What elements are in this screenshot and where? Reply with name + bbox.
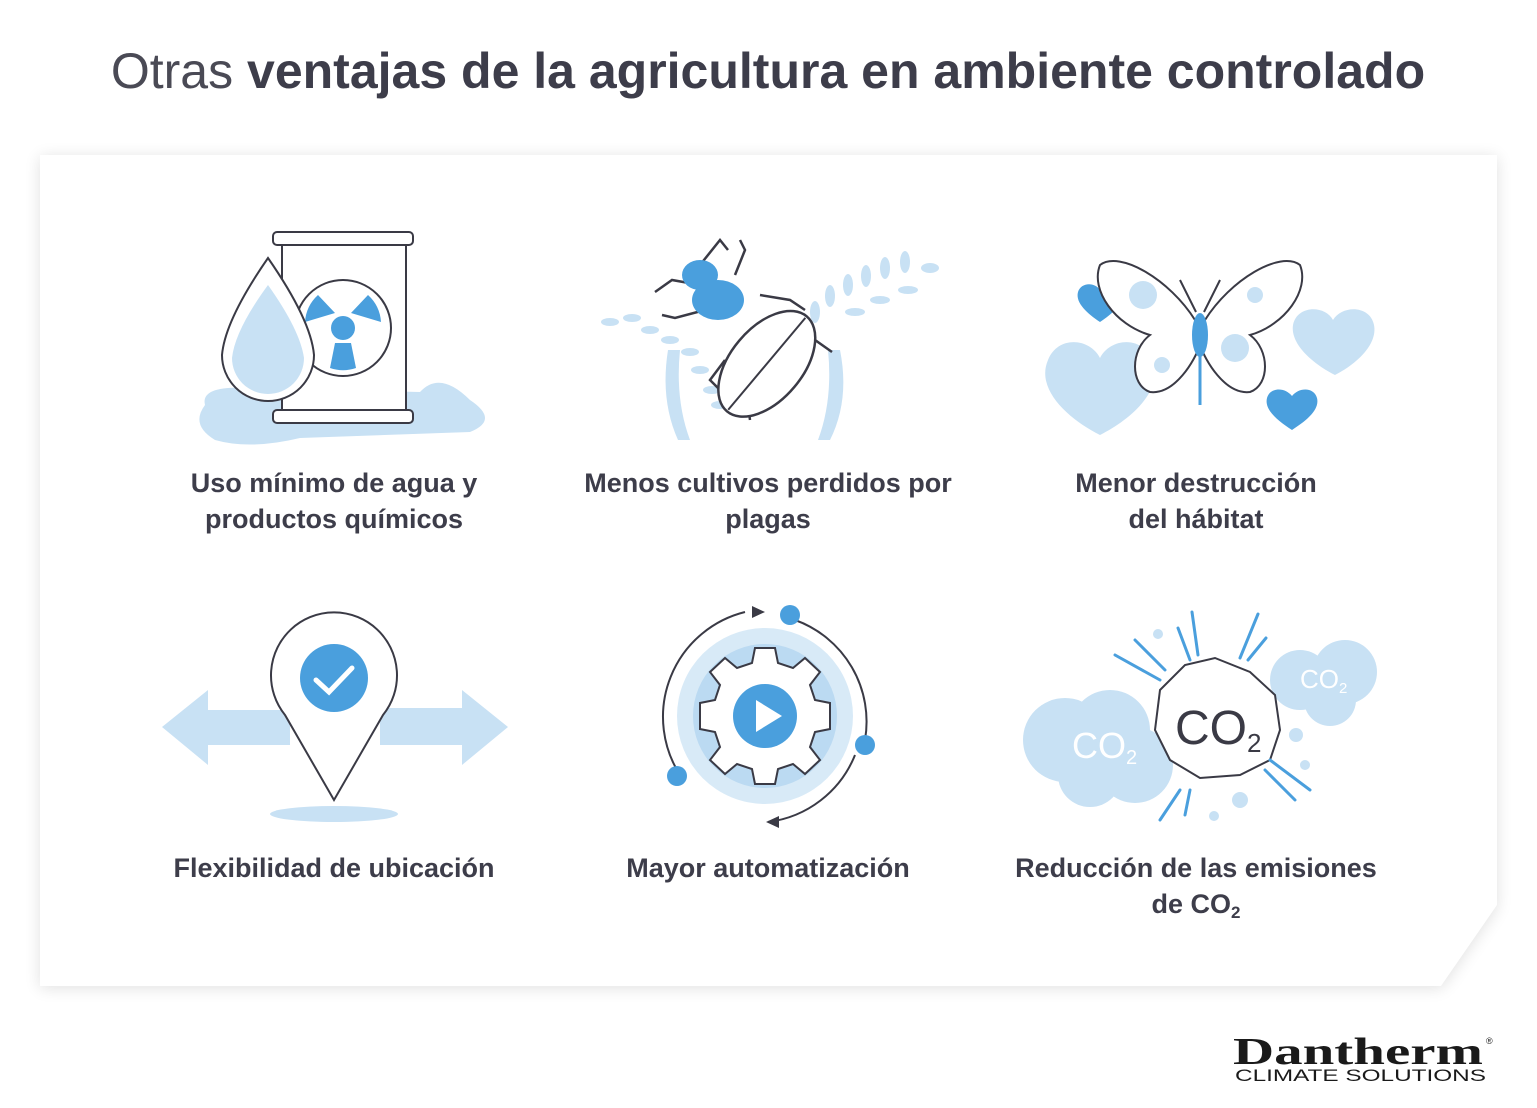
text: del hábitat xyxy=(1128,504,1264,534)
icon: CO2 clouds: 2 xyxy=(1126,747,1137,769)
text: de CO xyxy=(1152,889,1231,919)
icon: CO2 clouds: CO xyxy=(1072,725,1126,766)
logo xyxy=(1233,1031,1493,1085)
title: Otras ventajas de la agricultura en ambiente controlado xyxy=(111,43,1425,99)
text: plagas xyxy=(725,504,811,534)
icon: CO2 clouds: CO xyxy=(1300,664,1339,694)
icon: water drop and chemical barrel xyxy=(199,232,485,445)
label: water: Uso mínimo de agua y xyxy=(191,468,477,498)
label: pests: Menos cultivos perdidos por xyxy=(584,468,952,498)
icon: gear automation xyxy=(663,605,875,828)
icon: butterfly and hearts xyxy=(1045,261,1374,435)
text: 2 xyxy=(1231,903,1240,922)
logo: CLIMATE SOLUTIONS xyxy=(1235,1066,1486,1085)
icon: beetle and wheat xyxy=(601,240,939,440)
text: productos químicos xyxy=(205,504,463,534)
icon: CO2 clouds xyxy=(1023,612,1377,821)
label: automation: Mayor automatización xyxy=(626,853,910,883)
logo: Dantherm xyxy=(1233,1031,1483,1073)
logo: ® xyxy=(1486,1036,1493,1046)
icon: CO2 clouds: CO xyxy=(1175,702,1247,755)
label: CO2: Reducción de las emisiones xyxy=(1015,853,1377,883)
icon: CO2 clouds: 2 xyxy=(1339,680,1347,697)
label: habitat: Menor destrucción xyxy=(1075,468,1317,498)
icon: CO2 clouds: 2 xyxy=(1247,728,1261,758)
label: location: Flexibilidad de ubicación xyxy=(173,853,495,883)
panel xyxy=(40,155,1497,988)
icon: location pin with arrows xyxy=(162,612,508,822)
